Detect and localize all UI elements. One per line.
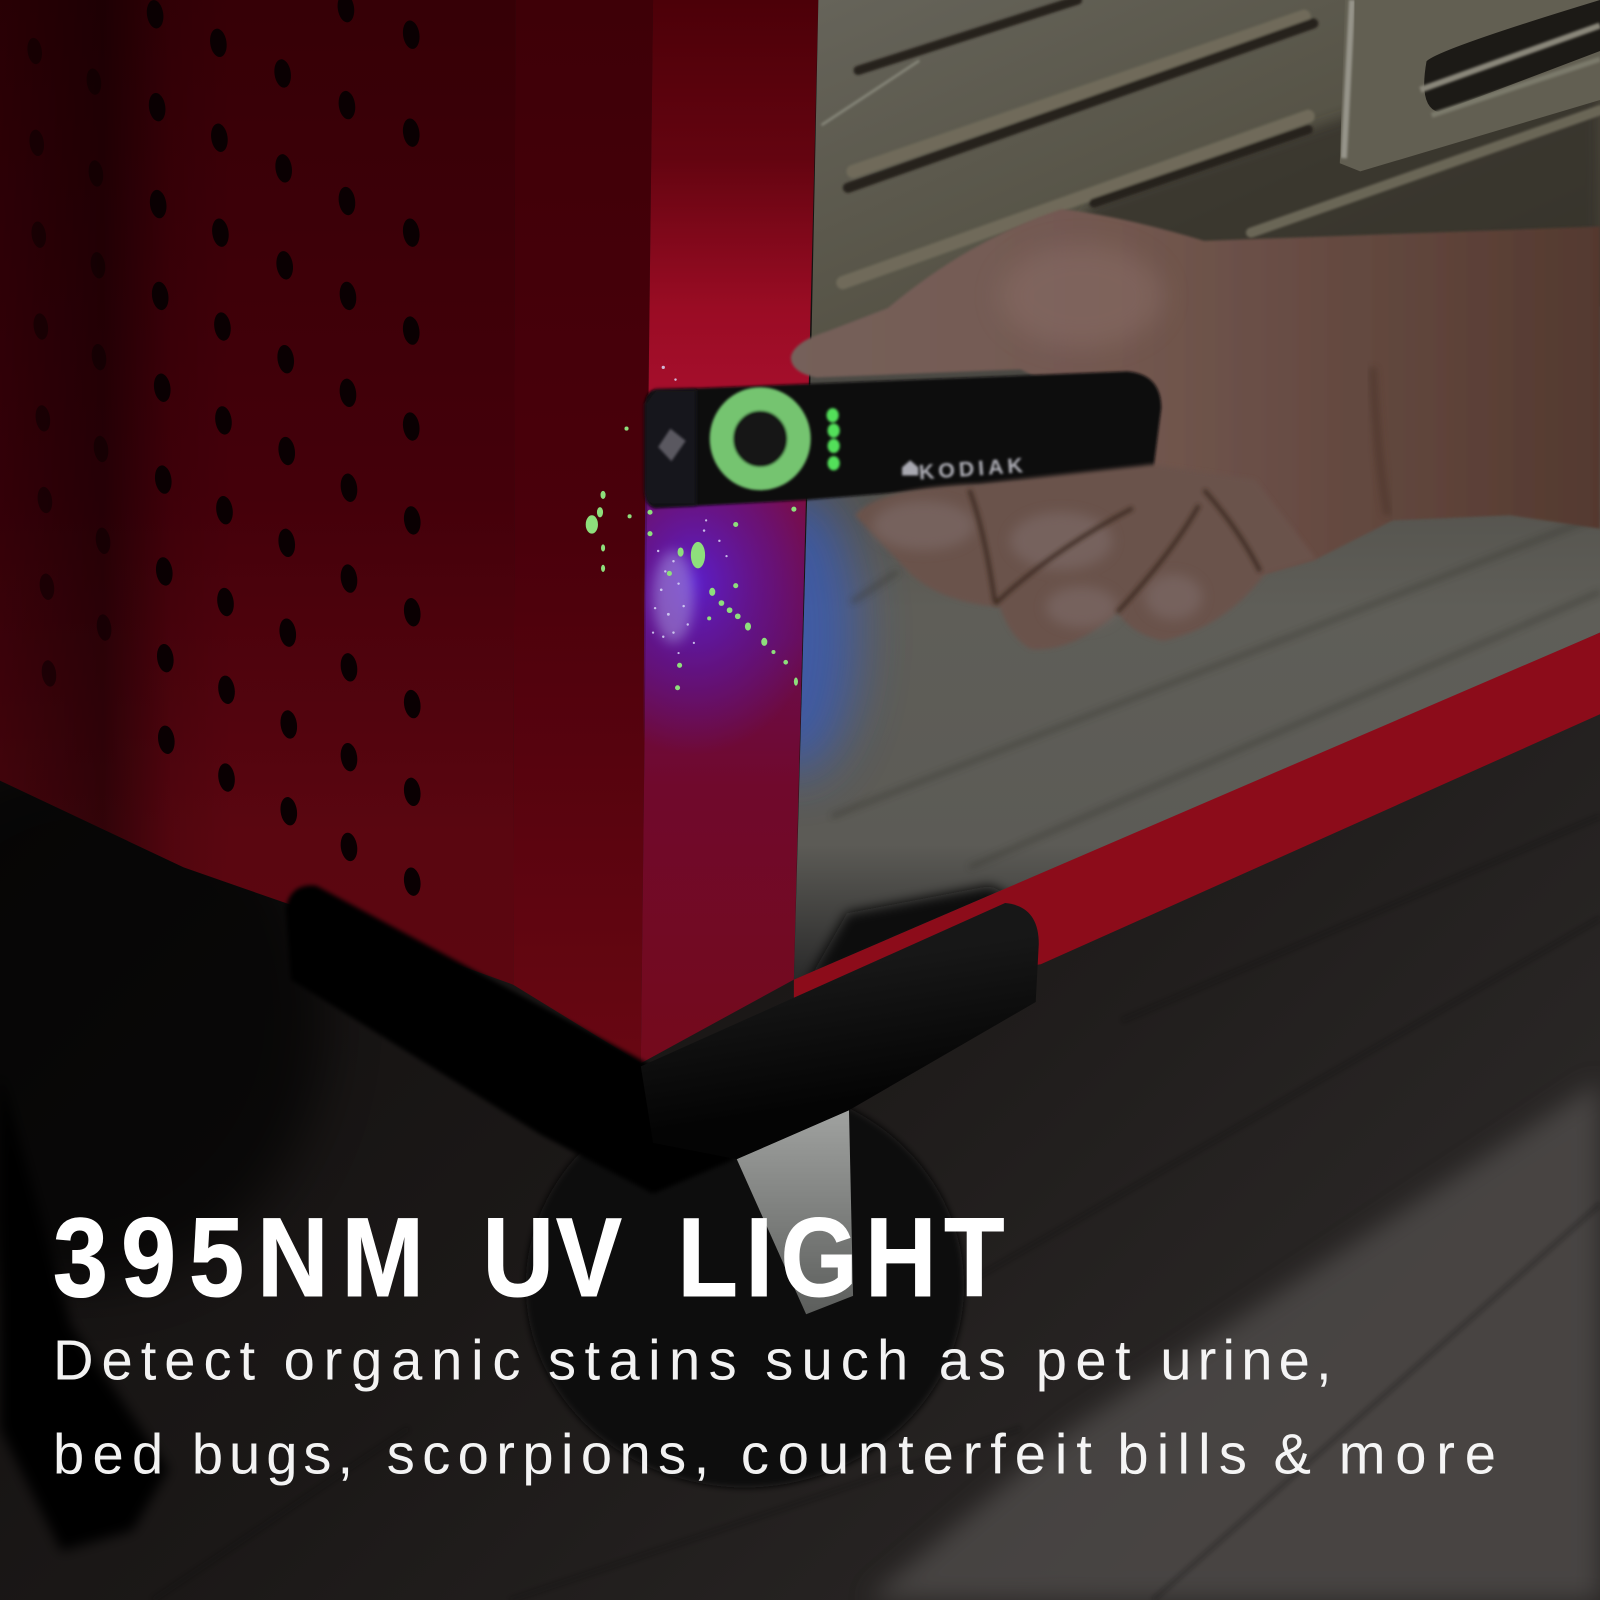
description line 1: organic (284, 1329, 520, 1392)
title (53, 1195, 1004, 1320)
lower steel drawer (794, 306, 1600, 980)
description line 2: scorpions, (387, 1422, 709, 1485)
side panel left shadow (0, 0, 515, 985)
floor left shadow (0, 755, 327, 1286)
description line 1: urine, (1160, 1329, 1332, 1392)
caster bracket right arm (641, 903, 1039, 1159)
caster bracket left arm (286, 885, 735, 1194)
brand label: KODIAK (918, 453, 1024, 485)
description line 1: as (939, 1329, 1006, 1392)
floor light patch (867, 1082, 1600, 1600)
black caster wheel (526, 1084, 964, 1488)
drawer ridges and handle (822, 0, 1600, 306)
description line 1: stains (548, 1329, 737, 1392)
speckle cloud (652, 366, 728, 654)
floor planks (153, 816, 1600, 1600)
description line 2: more (1339, 1422, 1496, 1485)
title: 395NM (53, 1195, 424, 1320)
red cabinet center panel (513, 0, 653, 1063)
description line 1: pet (1036, 1329, 1131, 1392)
fingers (855, 464, 1316, 649)
blue reflection and steel ridges (735, 490, 1600, 985)
faint left pegboard holes (26, 37, 113, 688)
KODIAK UV flashlight (645, 371, 1161, 508)
upper steel drawer (811, 0, 1600, 352)
description line 2: counterfeit (741, 1422, 1092, 1485)
description line 1: Detect (53, 1329, 256, 1392)
uv glow on corner panel (644, 492, 806, 744)
title: LIGHT (678, 1195, 1004, 1320)
power indicator dots (827, 408, 840, 470)
description line 2: bills (1117, 1422, 1247, 1485)
brand icon (902, 460, 918, 476)
description line 2: bugs, (192, 1422, 353, 1485)
description line 1: such (765, 1329, 908, 1392)
title: UV (483, 1195, 622, 1320)
description line 2 (53, 1422, 1496, 1485)
red frame rail (794, 633, 1600, 1000)
left shadow leg (0, 1071, 168, 1551)
description line 2: bed (53, 1422, 163, 1485)
hand and forearm (791, 209, 1600, 577)
red cabinet side panel (0, 0, 515, 985)
description line 1 (53, 1329, 1332, 1392)
icon: shield logo (658, 429, 686, 461)
red cabinet corner panel (641, 0, 818, 1063)
green glow ring (721, 399, 799, 479)
pegboard holes (145, 0, 422, 897)
glowing green stains (586, 427, 798, 690)
description line 2: & (1273, 1422, 1311, 1485)
